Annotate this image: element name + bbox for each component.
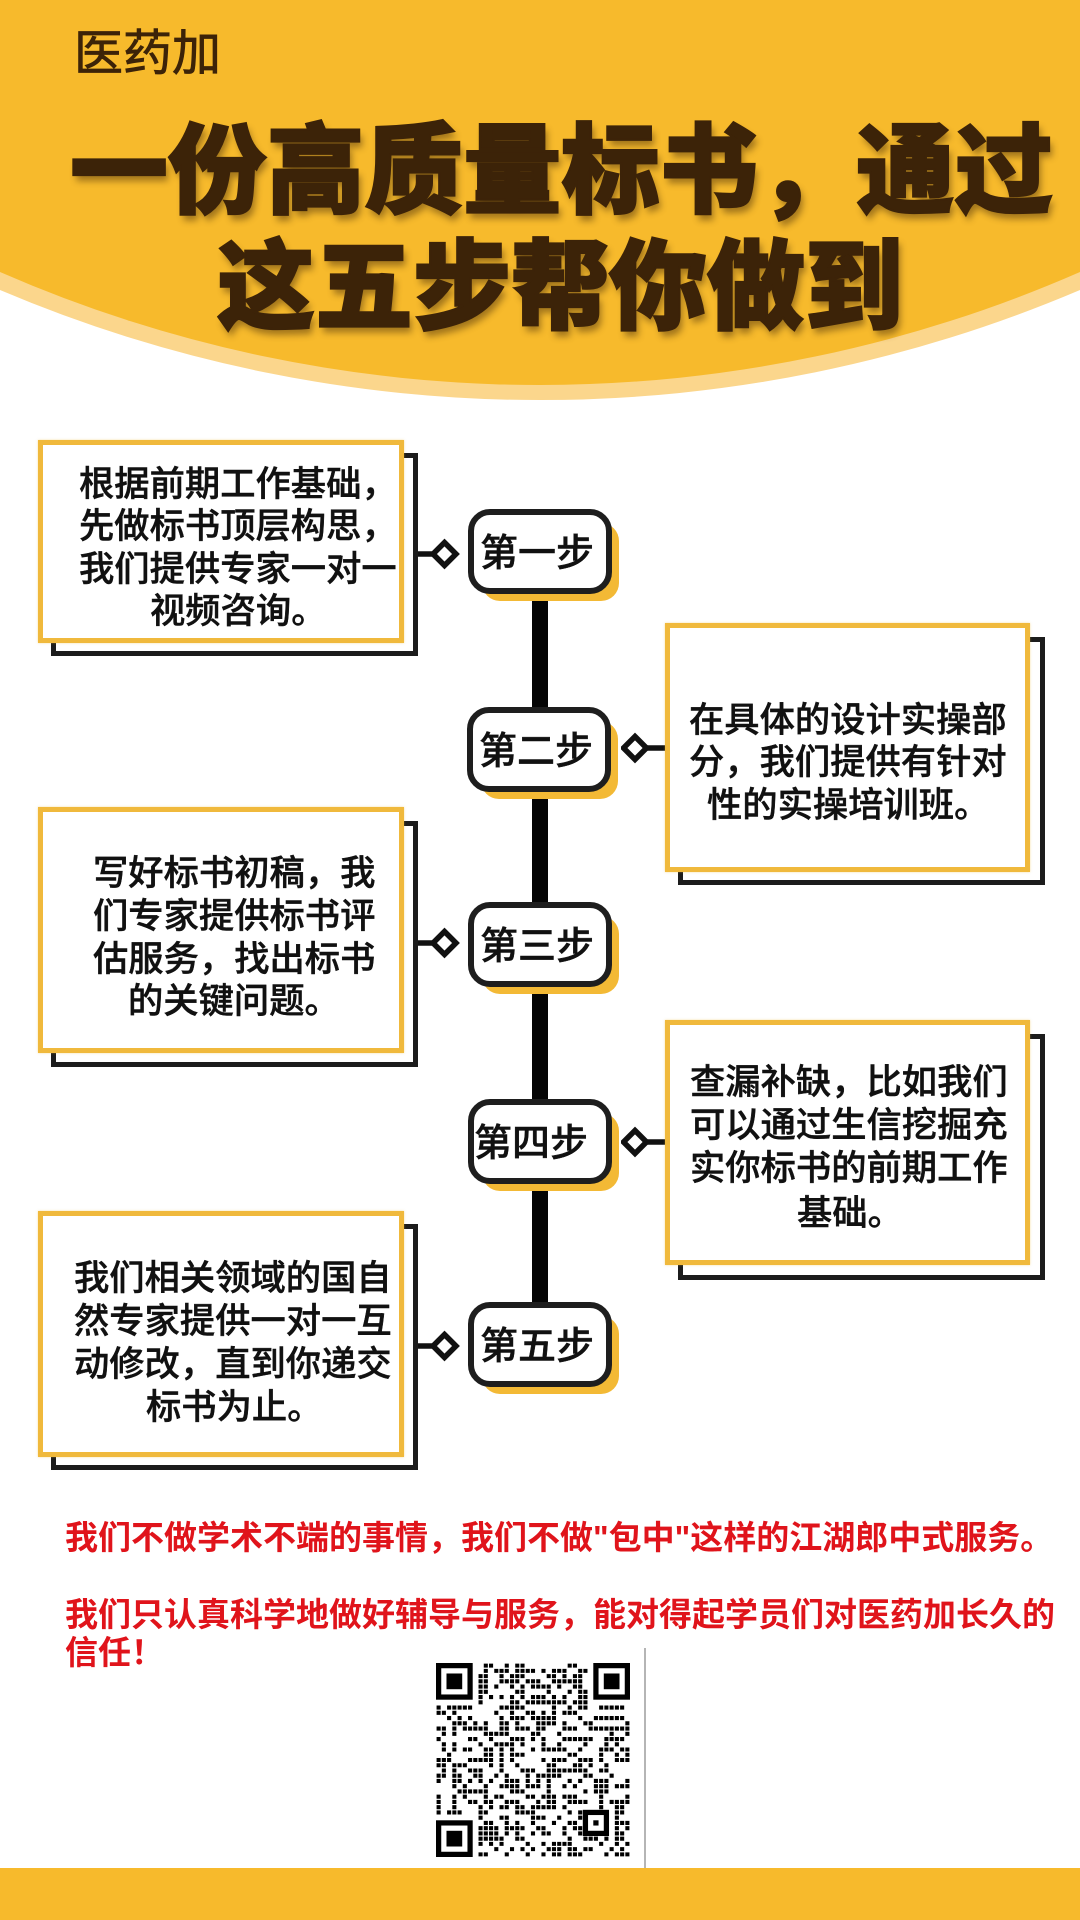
title line 2: 这五步帮你做到 (217, 232, 903, 342)
step 3 badge: 第三步 (480, 926, 594, 968)
panel text (74, 1259, 392, 1427)
bottom yellow bar (0, 1868, 1080, 1920)
brand name: 医药加 (74, 27, 221, 81)
panel text (689, 701, 1007, 825)
panel text (93, 854, 375, 1021)
panel back frame (51, 1224, 418, 1470)
QR code (436, 1663, 630, 1857)
connector: step 2 to panel (621, 732, 665, 764)
panel back frame (51, 821, 418, 1067)
panel text: 分，我们提供有针对 (689, 743, 1007, 782)
step 1 badge (468, 509, 619, 601)
panel: step 1 description (36, 438, 418, 656)
title line 1: 一份高质量标书，通过 (70, 116, 1053, 226)
step 4 badge: 第四步 (474, 1123, 588, 1165)
step 5 badge: 第五步 (480, 1326, 594, 1368)
panel back frame (678, 637, 1045, 885)
red statement text (65, 1519, 1055, 1671)
statement line 3: 信任！ (65, 1634, 164, 1671)
step 4 badge (468, 1099, 619, 1191)
panel text: 可以通过生信挖掘充 (690, 1106, 1008, 1145)
panel back frame (678, 1034, 1045, 1280)
panel text: 标书为止。 (146, 1388, 322, 1427)
panel: step 4 description (664, 1018, 1045, 1280)
panel: step 2 description (664, 622, 1045, 885)
step 3 badge (468, 902, 619, 994)
header background band (0, 0, 1080, 400)
panel back frame (51, 453, 418, 656)
statement line 1: 我们不做学术不端的事情，我们不做"包中"这样的江湖郎中式服务。 (65, 1519, 1053, 1556)
timeline vertical line (532, 590, 548, 1310)
panel text: 动修改，直到你递交 (74, 1345, 392, 1384)
connector: step 1 to panel (418, 538, 460, 570)
panel text: 们专家提供标书评 (93, 897, 375, 936)
panel yellow frame (665, 1020, 1030, 1265)
step 2 badge: 第二步 (479, 731, 593, 773)
panel: step 3 description (36, 806, 418, 1067)
panel yellow frame (665, 623, 1030, 872)
panel text: 估服务，找出标书 (93, 940, 375, 979)
vertical grey rule beside QR (644, 1648, 646, 1868)
panel text (79, 465, 397, 631)
panel text: 写好标书初稿，我 (93, 854, 375, 893)
panel text: 实你标书的前期工作 (690, 1149, 1008, 1188)
panel text: 视频咨询。 (150, 592, 326, 631)
panel text: 查漏补缺，比如我们 (690, 1063, 1008, 1102)
panel text: 根据前期工作基础， (79, 465, 397, 504)
panel text: 基础。 (797, 1194, 903, 1233)
statement line 2: 我们只认真科学地做好辅导与服务，能对得起学员们对医药加长久的 (65, 1596, 1055, 1633)
panel yellow frame (38, 1211, 404, 1457)
panel text: 我们提供专家一对一 (79, 550, 397, 589)
panel yellow frame (38, 807, 404, 1053)
connector: step 3 to panel (418, 928, 460, 958)
step 1 badge: 第一步 (480, 533, 594, 575)
panel text: 然专家提供一对一互 (74, 1302, 392, 1341)
title (70, 116, 1056, 342)
panel text: 的关键问题。 (128, 982, 340, 1021)
panel text: 在具体的设计实操部 (689, 701, 1007, 740)
panel text: 先做标书顶层构思， (79, 507, 397, 546)
panel text: 性的实操培训班。 (707, 786, 989, 825)
panel text: 我们相关领域的国自 (74, 1259, 392, 1298)
connector: step 4 to panel (621, 1126, 665, 1158)
panel yellow frame (38, 440, 404, 643)
connector: step 5 to panel (418, 1330, 460, 1362)
step 5 badge (468, 1302, 619, 1394)
panel text (690, 1063, 1008, 1233)
panel: step 5 description (36, 1210, 418, 1470)
step 2 badge (467, 707, 618, 799)
